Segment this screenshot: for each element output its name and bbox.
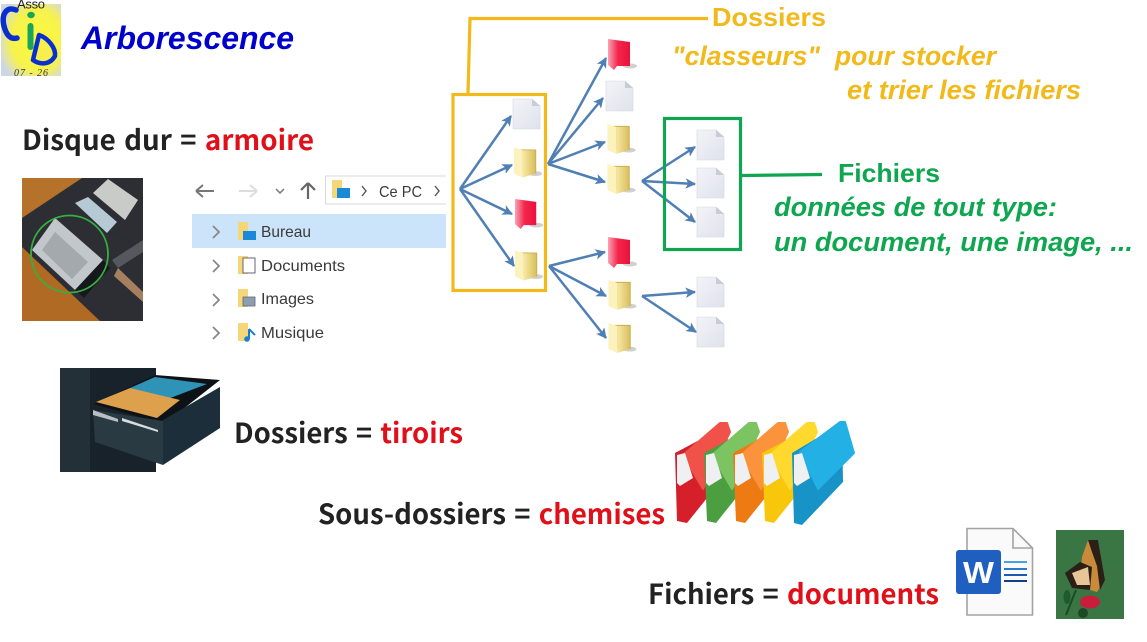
icon: word document <box>956 528 1032 615</box>
row: Musique <box>213 323 324 342</box>
photo: filing cabinet drawer <box>60 368 220 472</box>
callout: fichiers: données de tout type: <box>774 192 1057 222</box>
callout: fichiers: un document, une image, ... <box>774 227 1133 257</box>
row: Images: Images <box>261 291 314 308</box>
row: Images <box>213 289 314 308</box>
blue folder <box>792 422 854 525</box>
callout: fichiers: Fichiers <box>838 158 940 188</box>
file explorer panel <box>192 176 446 342</box>
label: dossiers = tiroirs: Dossiers = tiroirs <box>234 411 463 451</box>
title: Arborescence <box>80 20 294 56</box>
icon: word document: W <box>963 555 995 590</box>
logo: Asso CID 07-26: 07 - 26 <box>14 68 48 79</box>
selected row: Bureau <box>192 214 446 248</box>
green files frame with leader line <box>664 118 822 250</box>
green folder <box>704 423 759 523</box>
row: Documents: Documents <box>261 258 345 275</box>
heading: disque dur = armoire: Disque dur = armoire <box>22 118 314 158</box>
callout: dossiers: Dossiers <box>712 2 826 32</box>
label: fichiers = documents: Fichiers = documents <box>648 572 939 612</box>
photo: hard drive in laptop <box>22 178 143 321</box>
row: Musique: Musique <box>261 325 324 342</box>
row: Documents <box>213 256 345 275</box>
callout: fichiers <box>774 158 1133 257</box>
folder tree diagram <box>453 18 822 353</box>
orange folder <box>733 423 788 523</box>
callout: dossiers: et trier les fichiers <box>847 75 1081 105</box>
colored folders <box>675 422 854 525</box>
explorer navigation bar <box>196 176 446 204</box>
explorer navigation bar: Ce PC <box>379 184 422 201</box>
red folder <box>675 423 730 523</box>
tree arrows <box>460 58 696 338</box>
photo: butterfly <box>1056 530 1124 619</box>
tree icons <box>513 39 724 353</box>
callout: dossiers: "classeurs" pour stocker <box>672 41 997 71</box>
callout: dossiers <box>672 2 1081 105</box>
label: sous-dossiers = chemises: Sous-dossiers = chemises <box>318 492 665 532</box>
yellow folders frame with leader line <box>453 18 708 290</box>
yellow folder <box>762 423 817 523</box>
logo: Asso CID 07-26 <box>1 0 61 79</box>
selected row: Bureau: Bureau <box>261 224 311 241</box>
